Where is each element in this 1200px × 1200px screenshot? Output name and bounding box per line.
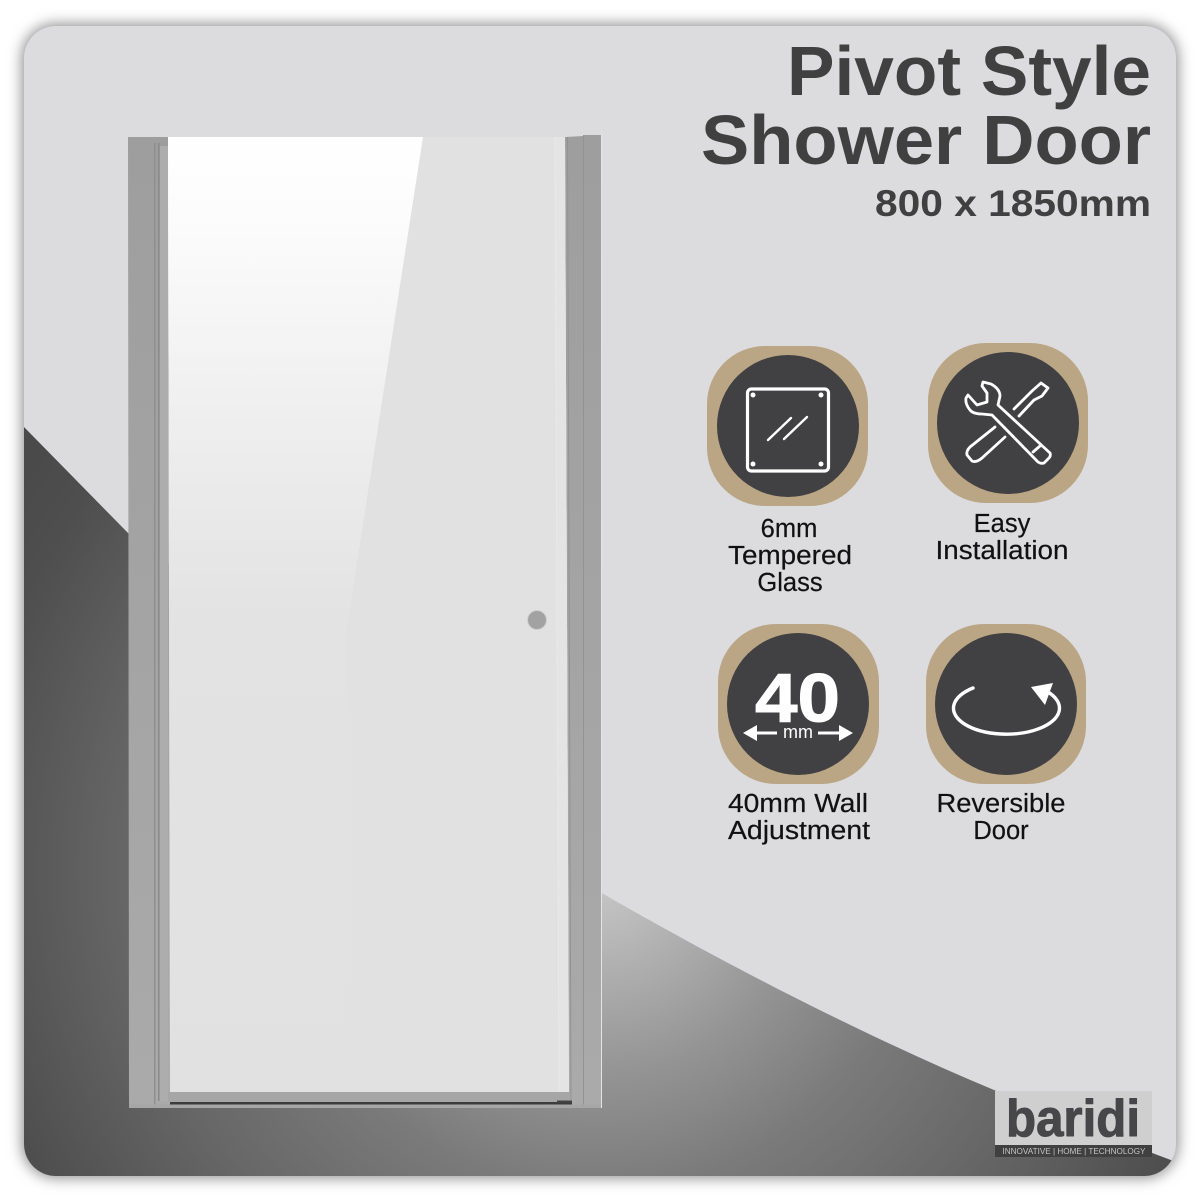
title (701, 32, 1151, 224)
label: Installation (936, 537, 1068, 565)
logo: baridi: INNOVATIVE | HOME | TECHNOLOGY (1002, 1146, 1146, 1156)
right wall channel (565, 135, 602, 1108)
label: Easy (974, 510, 1031, 538)
door knob (528, 610, 546, 630)
title: Shower Door (701, 101, 1151, 179)
logo: baridi: baridi (1006, 1090, 1140, 1148)
label: 6mm (761, 515, 817, 543)
shower door (128, 135, 602, 1108)
feature: easy installation (928, 343, 1088, 565)
icon: rotation arrow (926, 624, 1086, 784)
label: 40mm Wall (728, 790, 868, 818)
feature: wall adjustment (718, 624, 879, 845)
icon: glass pane (707, 346, 868, 506)
icon: wrench and screwdriver (928, 343, 1088, 503)
icon: 40 mm: 40 (755, 660, 840, 736)
left wall channel (128, 137, 170, 1108)
label: Door (973, 817, 1029, 845)
subtitle: 800 x 1850mm (875, 183, 1151, 224)
bottom rail (129, 1092, 601, 1108)
title: Pivot Style (787, 32, 1151, 110)
icon: 40 mm: mm (783, 722, 813, 742)
label: Adjustment (728, 817, 870, 845)
feature: tempered glass (707, 346, 868, 597)
feature: reversible door (926, 624, 1086, 845)
screwdriver (1014, 383, 1048, 416)
label: Reversible (936, 790, 1066, 818)
glass panel (168, 137, 569, 1092)
wrench (966, 382, 1050, 463)
dark curved swoosh background (24, 427, 1176, 1176)
icon: 40 mm (718, 624, 879, 784)
label: Glass (757, 569, 823, 597)
label: Tempered (728, 542, 852, 570)
